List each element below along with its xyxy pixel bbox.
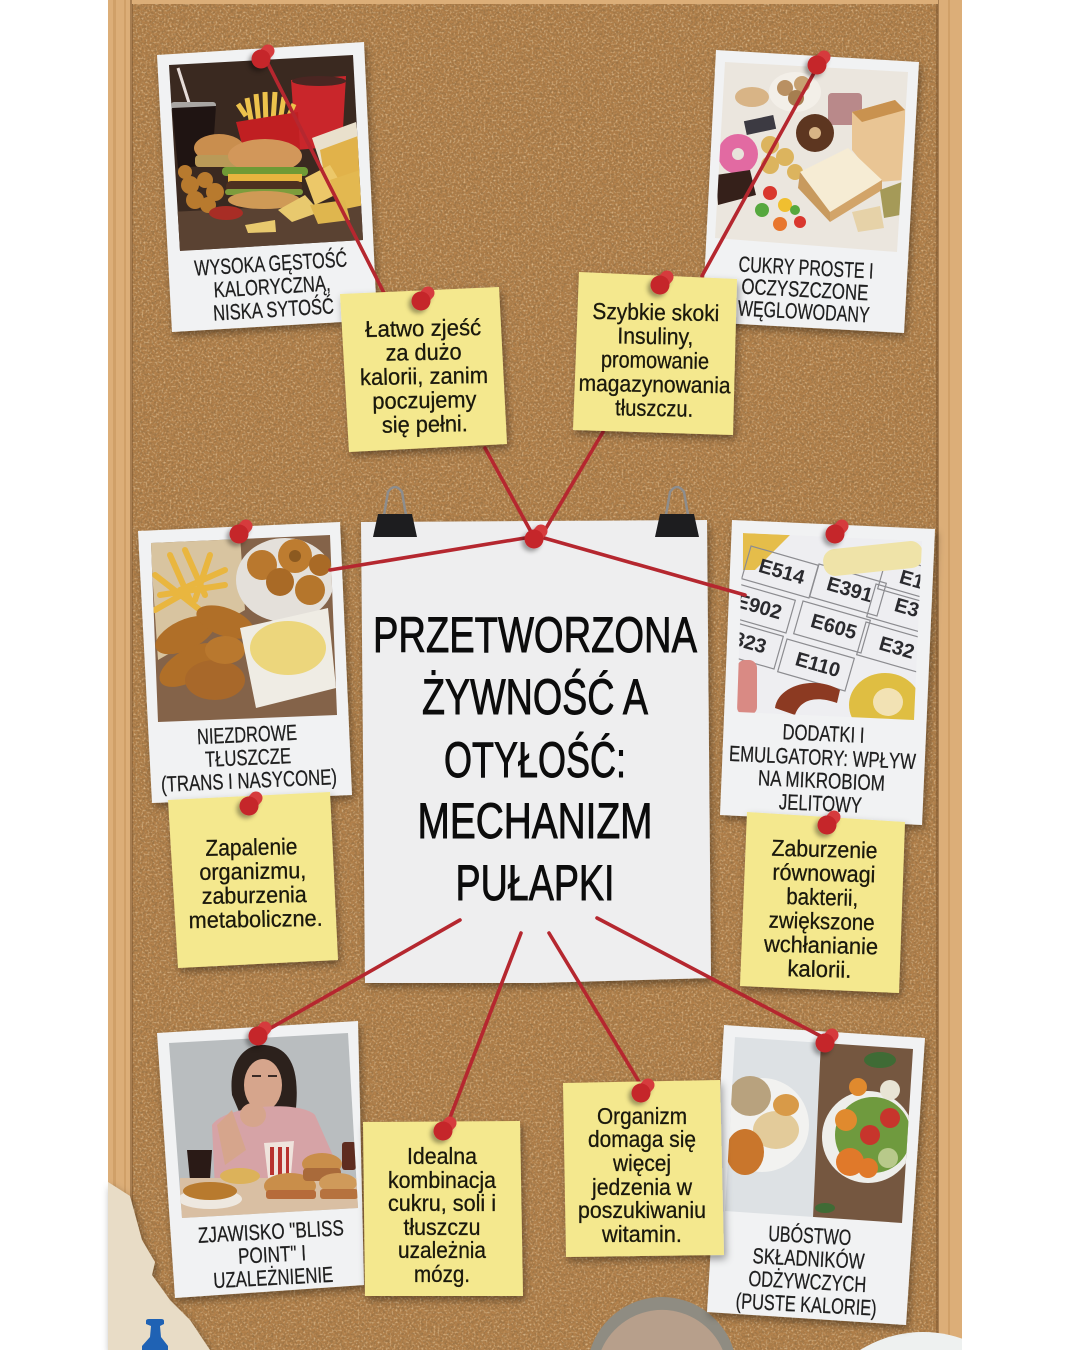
sticky note: ideal combination: mózg. bbox=[414, 1261, 470, 1287]
sticky note: easy to overeat: kalorii, zanim bbox=[360, 362, 488, 390]
sticky note: inflammation: zaburzenia bbox=[202, 881, 307, 909]
torn paper, bottom left bbox=[108, 1182, 210, 1350]
sticky note: body demands more food: poszukiwaniu bbox=[578, 1197, 706, 1223]
white plate at the bottom edge bbox=[860, 1332, 962, 1350]
title: ŻYWNOŚĆ A bbox=[422, 668, 648, 725]
caption: CUKRY PROSTE I bbox=[738, 252, 874, 284]
photo: E-number labels: E110 bbox=[793, 648, 843, 682]
caption: UBÓSTWO bbox=[768, 1221, 852, 1250]
sticky note: gut bacteria imbalance: bakterii, bbox=[786, 883, 859, 911]
caption: KALORYCZNĄ, bbox=[213, 270, 331, 303]
polaroid: high calorie density bbox=[157, 42, 377, 332]
sticky note: inflammation: organizmu, bbox=[199, 857, 307, 885]
photo: E-number labels: E391 bbox=[824, 573, 875, 607]
photo: E-number labels: 323 bbox=[731, 628, 769, 658]
polaroid: bliss point and addiction bbox=[157, 1021, 364, 1298]
caption bbox=[194, 246, 351, 327]
sticky note: gut bacteria imbalance: Zaburzenie bbox=[771, 835, 878, 863]
title: PRZETWORZONA bbox=[373, 607, 697, 663]
sticky note: ideal combination: kombinacja bbox=[388, 1167, 496, 1193]
photo: fried food bbox=[148, 530, 343, 725]
sticky note: body demands more food bbox=[563, 1080, 724, 1257]
sticky note: ideal combination: cukru, soli i bbox=[388, 1190, 496, 1216]
caption: ZJAWISKO "BLISS bbox=[197, 1215, 344, 1248]
photo: E-number labels bbox=[737, 533, 922, 720]
photo: E-number labels: E3 bbox=[892, 594, 921, 622]
sticky note: inflammation: metaboliczne. bbox=[188, 905, 323, 933]
caption: SKŁADNIKÓW bbox=[752, 1243, 865, 1274]
caption bbox=[736, 252, 874, 327]
caption: POINT" I bbox=[237, 1240, 307, 1269]
sticky note: body demands more food: Organizm bbox=[597, 1103, 687, 1129]
central paper with title bbox=[361, 520, 711, 983]
sticky note: ideal combination: Idealna bbox=[407, 1143, 477, 1169]
sticky note: easy to overeat: za dużo bbox=[385, 338, 462, 366]
title: OTYŁOŚĆ: bbox=[444, 731, 626, 788]
sticky note: insulin spikes: Szybkie skoki bbox=[592, 298, 720, 326]
sticky note: insulin spikes bbox=[573, 272, 737, 435]
polaroid: additives and emulsifiers bbox=[707, 520, 954, 825]
photo: sweets and bread bbox=[715, 62, 908, 252]
title: PUŁAPKI bbox=[456, 855, 614, 911]
cork board bbox=[108, 0, 962, 1350]
caption: JELITOWY bbox=[778, 789, 863, 818]
caption bbox=[159, 718, 337, 797]
sticky note: inflammation bbox=[168, 792, 338, 968]
sticky note: inflammation: Zapalenie bbox=[205, 833, 298, 861]
caption: ODŻYWCZYCH bbox=[748, 1266, 867, 1297]
caption: TŁUSZCZE bbox=[205, 743, 292, 772]
sticky note: body demands more food: witamin. bbox=[601, 1221, 682, 1247]
sticky note: ideal combination bbox=[363, 1121, 523, 1296]
caption: UZALEŻNIENIE bbox=[213, 1262, 334, 1293]
caption bbox=[197, 1215, 347, 1294]
sticky note: body demands more food: więcej bbox=[612, 1150, 671, 1176]
red strings bbox=[262, 56, 828, 1128]
caption: (PUSTE KALORIE) bbox=[735, 1288, 877, 1321]
caption: WĘGLOWODANY bbox=[737, 296, 871, 327]
photo: E-number labels: E605 bbox=[808, 610, 859, 644]
sticky note: body demands more food: jedzenia w bbox=[591, 1174, 692, 1200]
caption: NA MIKROBIOM bbox=[757, 765, 885, 796]
sticky note: ideal combination: uzależnia bbox=[398, 1237, 486, 1263]
photo: E-number labels: E32 bbox=[877, 633, 917, 664]
photo: E-number labels: E1 bbox=[897, 566, 926, 594]
sticky note: easy to overeat: się pełni. bbox=[382, 410, 468, 438]
caption: EMULGATORY: WPŁYW bbox=[729, 741, 917, 774]
sticky note: gut bacteria imbalance bbox=[740, 812, 905, 993]
photo: E-number labels: E514 bbox=[756, 555, 808, 589]
sticky note: easy to overeat: poczujemy bbox=[372, 386, 477, 414]
caption bbox=[735, 1219, 881, 1321]
sticky note: insulin spikes: tłuszczu. bbox=[615, 394, 693, 422]
sticky note: body demands more food: domaga się bbox=[588, 1126, 696, 1152]
caption bbox=[726, 717, 918, 820]
sticky note: insulin spikes: Insuliny, bbox=[617, 322, 694, 350]
red push pins bbox=[230, 50, 844, 1140]
sticky note: ideal combination: tłuszczu bbox=[404, 1214, 480, 1240]
title bbox=[373, 607, 697, 911]
sticky note: insulin spikes: promowanie bbox=[601, 346, 709, 374]
title: MECHANIZM bbox=[418, 793, 652, 849]
photo: woman eating fast food bbox=[165, 1030, 360, 1220]
sticky note: gut bacteria imbalance: kalorii. bbox=[787, 955, 852, 983]
sticky note: gut bacteria imbalance: wchłanianie bbox=[763, 930, 878, 959]
wooden frame bbox=[108, 0, 962, 1350]
polaroid: simple sugars and refined carbs bbox=[702, 50, 919, 333]
photo: E-number labels: E902 bbox=[733, 590, 784, 624]
sticky note: easy to overeat bbox=[340, 287, 507, 452]
sticky note: gut bacteria imbalance: zwiększone bbox=[768, 907, 875, 935]
caption: NIEZDROWE bbox=[197, 720, 298, 749]
caption: OCZYSZCZONE bbox=[741, 274, 869, 305]
caption: NISKA SYTOŚĆ bbox=[212, 293, 335, 326]
icon: binder clip left bbox=[373, 487, 417, 537]
sticky note: gut bacteria imbalance: równowagi bbox=[772, 859, 876, 887]
sticky note: insulin spikes: magazynowania bbox=[578, 370, 731, 398]
caption: (TRANS I NASYCONE) bbox=[161, 764, 337, 797]
icon: binder clip right bbox=[655, 487, 699, 537]
caption: DODATKI I bbox=[782, 719, 865, 748]
sticky note: easy to overeat: Łatwo zjeść bbox=[365, 314, 481, 342]
photo: fast food bbox=[169, 55, 363, 251]
photo: two plates of food bbox=[725, 1037, 913, 1223]
polaroid: unhealthy fats bbox=[138, 522, 352, 803]
icon: blue push pin bbox=[142, 1319, 168, 1350]
caption: WYSOKA GĘSTOŚĆ bbox=[194, 246, 348, 281]
polaroid: nutrient poverty bbox=[707, 1025, 925, 1325]
bowl at the bottom edge bbox=[590, 1297, 734, 1350]
